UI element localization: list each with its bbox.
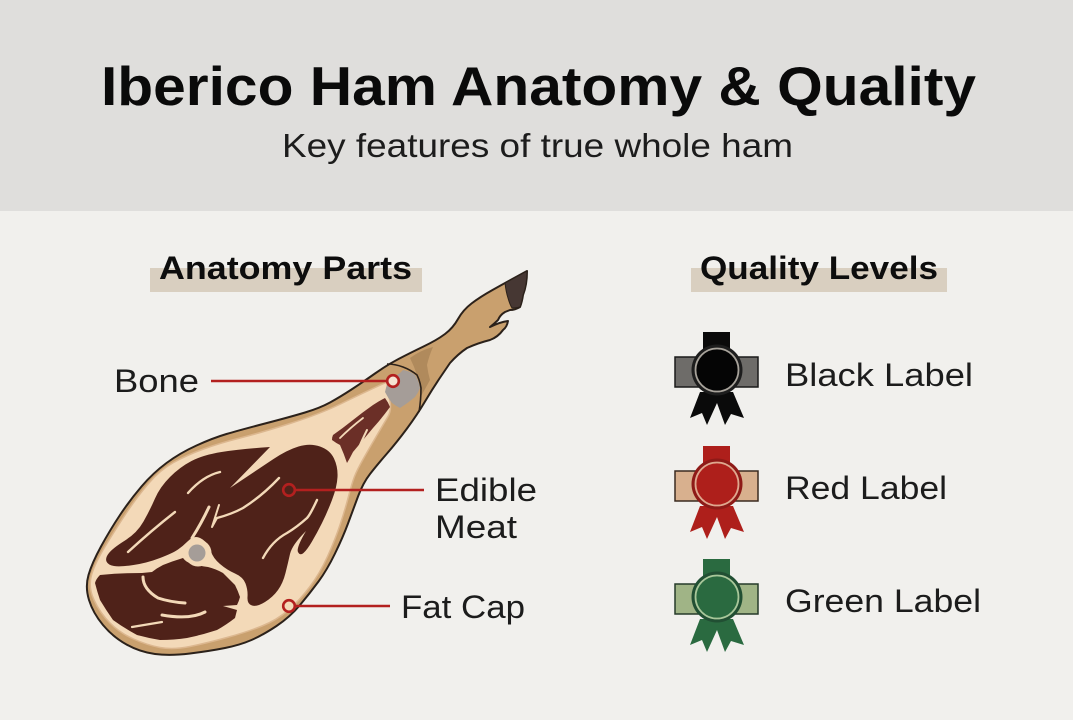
callout: fat cap: Fat Cap (401, 589, 525, 625)
header band (0, 0, 1073, 211)
subtitle: Key features of true whole ham (282, 127, 793, 164)
meat: small upper muscle (332, 398, 390, 463)
skin seam (387, 364, 421, 412)
text: black label: Black Label (785, 357, 973, 393)
ham skin outline (87, 271, 527, 655)
center bone (184, 540, 212, 566)
callout: edible meat (283, 472, 537, 545)
icon: red label rosette (675, 446, 758, 539)
shank shading (410, 347, 433, 398)
callout: bone: Bone (114, 363, 199, 399)
marbling veins (128, 418, 367, 627)
title: Iberico Ham Anatomy & Quality (101, 55, 976, 117)
meat: lower muscle (95, 558, 240, 640)
hoof (505, 271, 527, 308)
meat: main muscle (106, 445, 338, 606)
callout: edible meat: Meat (435, 509, 517, 545)
heading: anatomy parts: Anatomy Parts (159, 250, 412, 286)
callout: fat cap (283, 589, 525, 625)
ham illustration (87, 271, 527, 655)
shoulder bone (385, 370, 420, 408)
heading: quality levels: Quality Levels (700, 250, 938, 286)
icon: green label rosette (675, 559, 758, 652)
icon: black label rosette (675, 332, 758, 425)
fat layer (90, 382, 391, 649)
text: green label: Green Label (785, 583, 981, 619)
callout: bone (114, 363, 399, 399)
callout: edible meat: Edible (435, 472, 537, 508)
text: red label: Red Label (785, 470, 947, 506)
